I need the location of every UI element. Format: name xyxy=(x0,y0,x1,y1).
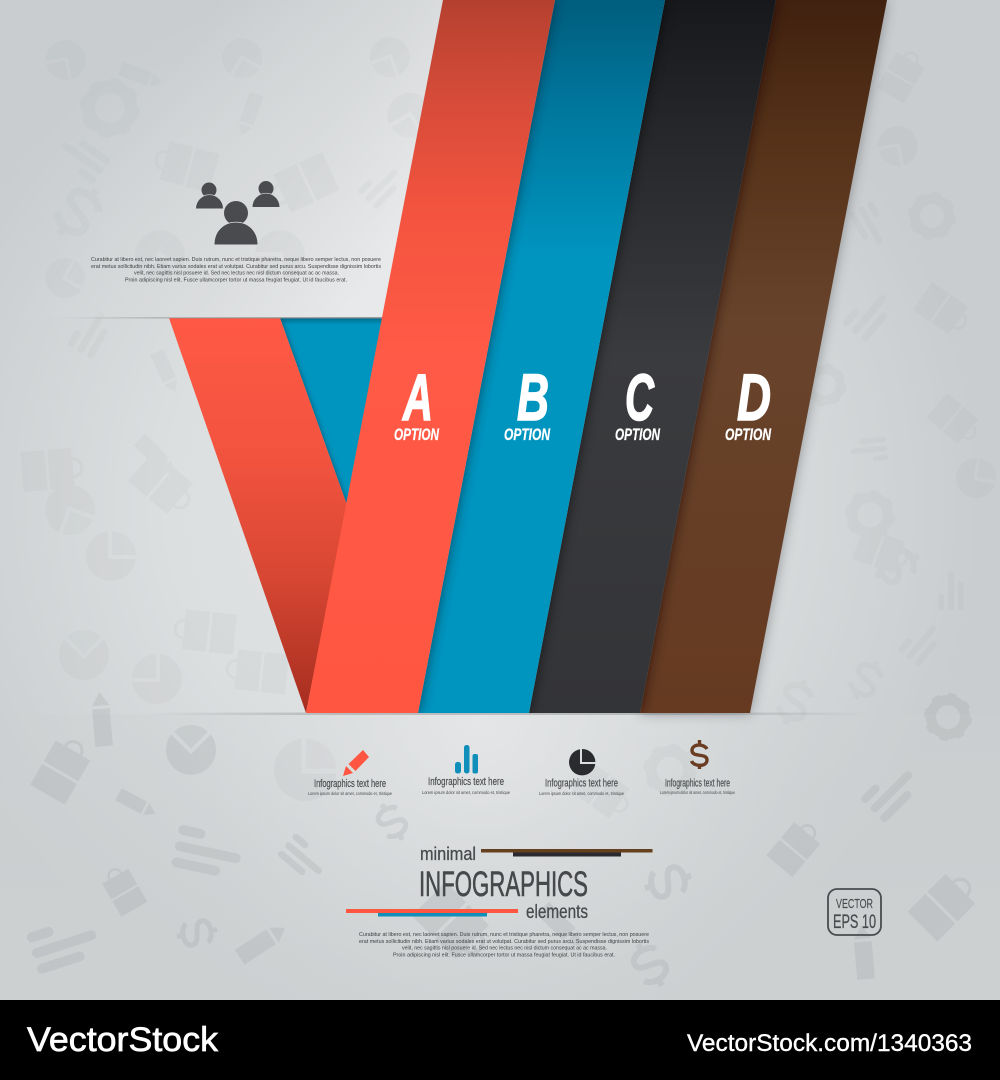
upper panel fold shadow xyxy=(60,317,384,319)
feature: pie chart: Lorem ipsum dolor sit amet, commodo et, tristique xyxy=(539,791,624,796)
feature: pie chart: Infographics text here xyxy=(545,778,618,790)
option D label xyxy=(725,360,772,444)
feature: bar chart xyxy=(422,745,510,795)
lower paragraph: Proin adipiscing nisl elit. Fusce ullamcorper tortor ut massa feugiat feugiat. Ut id faucibus erat. xyxy=(393,952,615,958)
people icon xyxy=(196,181,280,244)
ribbon fold: red V arm xyxy=(169,318,347,713)
footer bar xyxy=(0,1000,1000,1080)
strip D: brown xyxy=(640,0,887,713)
option C label xyxy=(615,360,661,444)
option D label: OPTION xyxy=(725,426,772,444)
feature: dollar: Lorem ipsum dolor sit amet, commodo et, tristique xyxy=(660,790,735,795)
brown strip cast shadow on background xyxy=(640,0,887,713)
title block xyxy=(346,844,652,923)
upper paragraph: Proin adipiscing nisl elit. Fusce ullamcorper tortor ut massa feugiat feugiat. Ut id faucibus erat. xyxy=(125,277,347,283)
upper paper panel xyxy=(0,0,443,318)
ribbon fold: blue triangle xyxy=(280,318,382,504)
feature: pie chart xyxy=(539,749,624,796)
upper paragraph xyxy=(91,257,381,283)
vector eps badge: VECTOR xyxy=(836,896,873,911)
lower paragraph: Curabitur at libero est, nec laoreet sapien. Duis rutrum, nunc et tristique pharetra, neque libero semper lectus, non posuere xyxy=(359,932,649,938)
faint background icons: upper panel xyxy=(38,31,441,305)
feature: bar chart: Infographics text here xyxy=(428,776,504,788)
background icons: lower panel xyxy=(30,692,982,992)
option A label: OPTION xyxy=(394,426,440,444)
vector eps badge: EPS 10 xyxy=(833,912,876,933)
feature: pencil: Lorem ipsum dolor sit amet, commodo et, tristique xyxy=(308,791,392,796)
lower paragraph: erat metus sollicitudin nibh. Etiam varius sodales erat ut volutpat. Curabitur sed purus arcu. Suspendisse dignissim lobortis xyxy=(359,939,649,945)
lower paper panel xyxy=(0,714,1000,1000)
footer bar: VectorStock.com/1340363 xyxy=(687,1030,972,1057)
upper paragraph: erat metus sollicitudin nibh. Etiam varius sodales erat ut volutpat. Curabitur sed purus arcu. Suspendisse dignissim lobortis xyxy=(91,264,381,270)
feature: pencil xyxy=(308,750,392,796)
strip A: red xyxy=(306,0,555,713)
strip C: dark xyxy=(529,0,776,713)
option C label: OPTION xyxy=(615,426,661,444)
feature: bar chart: Lorem ipsum dolor sit amet, commodo et, tristique xyxy=(422,790,510,795)
option B label: B xyxy=(517,360,549,434)
lower paragraph xyxy=(359,932,649,958)
title block: elements xyxy=(526,902,588,923)
title block: minimal xyxy=(420,844,476,864)
faint background icons: middle and right xyxy=(20,46,999,729)
title block: INFOGRAPHICS xyxy=(419,865,588,904)
strip B: blue xyxy=(418,0,665,713)
feature: dollar xyxy=(660,740,735,795)
very faint icons behind feature row xyxy=(274,739,693,823)
option B label: OPTION xyxy=(504,426,551,444)
lower edge shadow line xyxy=(150,712,870,715)
option D label: D xyxy=(737,360,771,434)
upper paragraph: velit, nec sagittis nisl posuere id. Sed nec lectus nec nisl dictum consequat ac ac massa. xyxy=(134,271,339,277)
feature: pencil: Infographics text here xyxy=(314,778,386,790)
option B label xyxy=(504,360,551,444)
feature: dollar: Infographics text here xyxy=(665,778,730,790)
lower paragraph: velit, nec sagittis nisl posuere id. Sed nec lectus nec nisl dictum consequat ac ac massa. xyxy=(402,946,607,952)
upper paragraph: Curabitur at libero est, nec laoreet sapien. Duis rutrum, nunc et tristique pharetra, neque libero semper lectus, non posuere xyxy=(91,257,381,263)
option A label: A xyxy=(402,360,433,434)
vector eps badge xyxy=(828,889,881,935)
option A label xyxy=(394,360,440,444)
option C label: C xyxy=(625,360,655,434)
footer bar: VectorStock xyxy=(27,1021,219,1059)
